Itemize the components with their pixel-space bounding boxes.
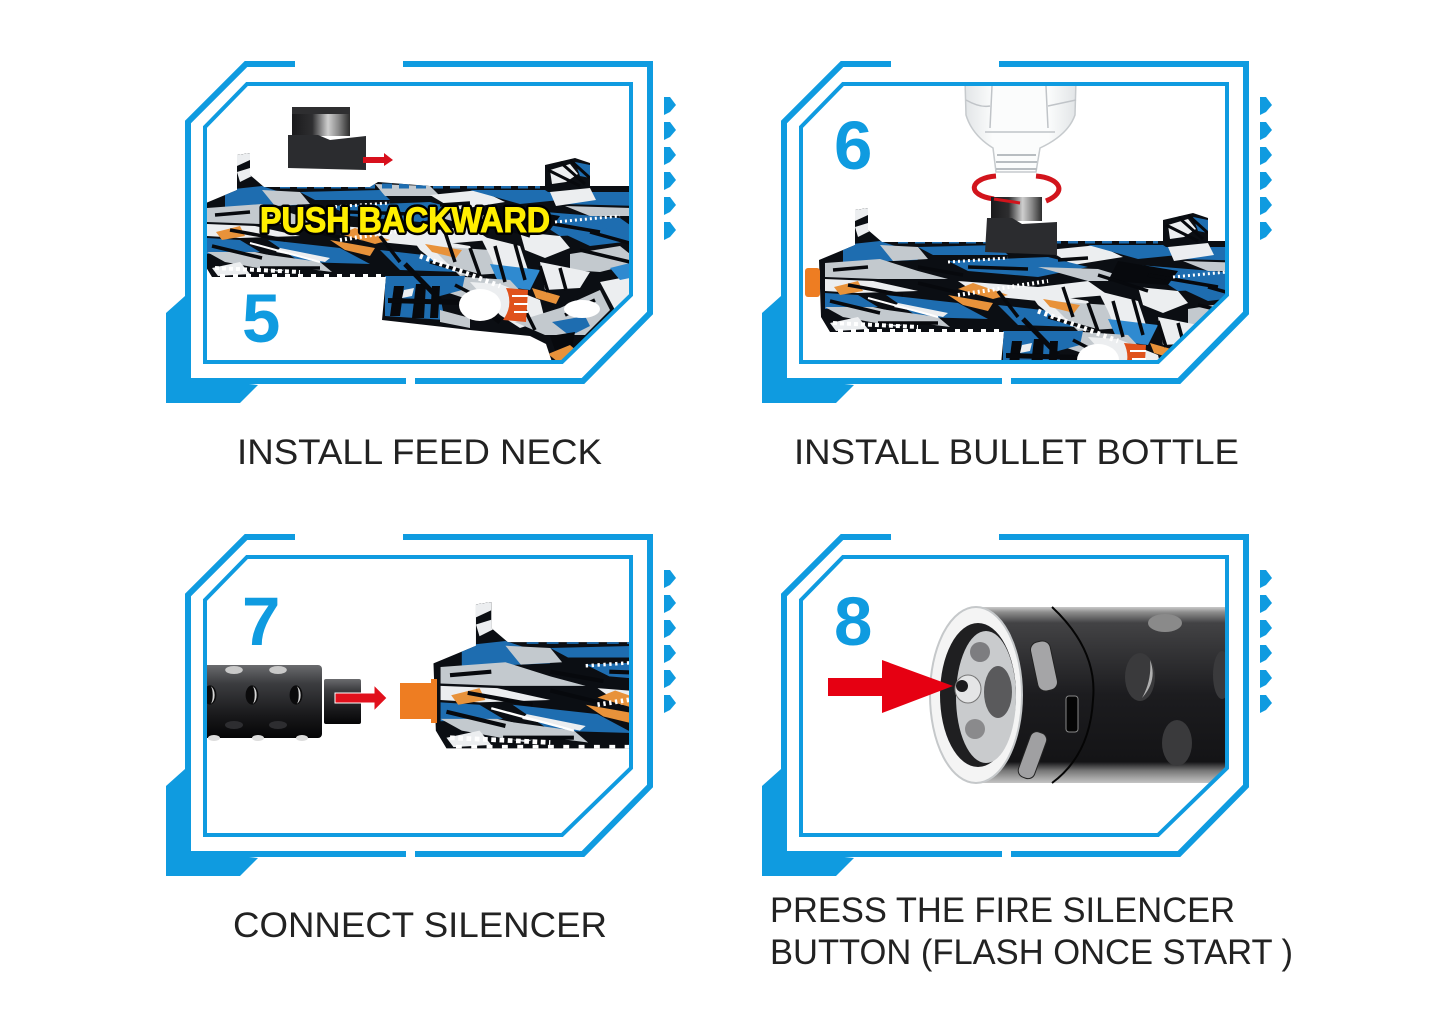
frame bbox=[166, 64, 676, 403]
caption: PRESS THE FIRE SILENCER bbox=[770, 890, 1235, 930]
silencer tube bbox=[200, 665, 361, 741]
orange muzzle bbox=[400, 679, 437, 723]
step number 8: 8 bbox=[834, 583, 872, 660]
panel: step 7 connect silencer bbox=[166, 534, 676, 938]
water bottle bbox=[965, 80, 1076, 172]
silencer close-up bbox=[930, 607, 1233, 783]
slots bbox=[1016, 639, 1078, 781]
step number 5: 5 bbox=[242, 280, 280, 357]
frame bbox=[762, 537, 1272, 876]
frame bbox=[762, 64, 1272, 403]
panel: step 6 install bullet bottle bbox=[762, 61, 1272, 464]
end cap sockets bbox=[955, 642, 1012, 739]
step number 6: 6 bbox=[834, 107, 872, 184]
caption: INSTALL BULLET BOTTLE bbox=[794, 432, 1239, 472]
rotation ring arrow back bbox=[974, 176, 1059, 201]
caption: INSTALL FEED NECK bbox=[237, 432, 602, 472]
gun with muzzle bbox=[805, 208, 1225, 360]
push backward label: PUSH BACKWARD bbox=[260, 201, 550, 240]
gun with camouflage bbox=[207, 153, 629, 360]
frame bbox=[166, 537, 676, 876]
red arrow pointing backward bbox=[363, 153, 393, 166]
clear end ring bbox=[930, 607, 1022, 783]
panel: step 8 press fire silencer button bbox=[762, 537, 1293, 972]
big red arrow bbox=[828, 660, 953, 713]
panel: step 5 install feed neck bbox=[166, 64, 705, 472]
red arrow to muzzle bbox=[335, 685, 387, 711]
feed neck mounted bbox=[985, 197, 1057, 255]
push backward label: PUSH BACKWARD bbox=[260, 201, 550, 240]
step number 7: 7 bbox=[242, 583, 280, 660]
gun front section bbox=[434, 602, 629, 748]
feed neck part bbox=[288, 107, 366, 170]
rotation ring arrow front bbox=[994, 199, 1020, 203]
caption second line: BUTTON (FLASH ONCE START ) bbox=[770, 932, 1293, 972]
side holes bbox=[1125, 614, 1231, 766]
caption: CONNECT SILENCER bbox=[233, 905, 607, 945]
